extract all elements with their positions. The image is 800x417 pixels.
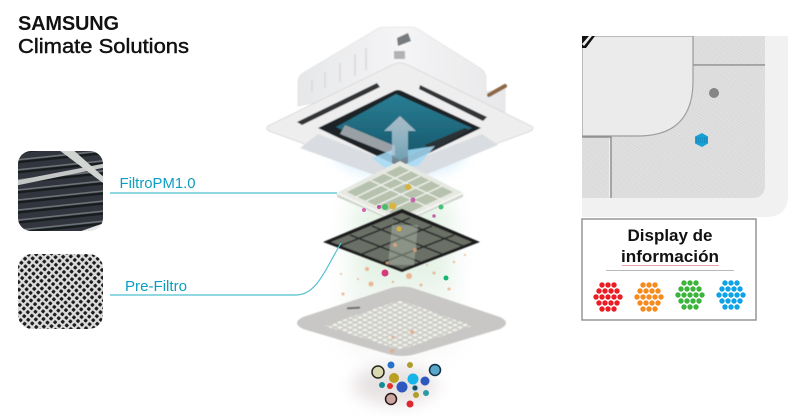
logo: Samsung Climate Solutions: SAMSUNG [18, 13, 119, 35]
thumbnail: PM1.0 filter [18, 151, 103, 231]
blue air [336, 94, 472, 160]
allergen particles [372, 362, 440, 408]
leader line: FiltroPM1.0 [110, 192, 337, 194]
blue indicator [716, 280, 746, 310]
body side ribs [312, 48, 366, 92]
orange indicator [634, 282, 664, 312]
strip edges [582, 36, 765, 198]
centre plate [582, 36, 693, 136]
copper pipe [489, 86, 505, 95]
coloured particles [362, 184, 448, 280]
logo: Samsung Climate Solutions: Climate Solutions [18, 36, 189, 58]
perforated top strip [693, 36, 765, 65]
leader line: Pre-Filtro [110, 243, 341, 295]
legend: display de información: información [621, 247, 719, 266]
illustration: pre-filter [323, 209, 480, 272]
pipe bracket [397, 33, 411, 46]
illustration: front grille [297, 286, 506, 356]
panel lower vents [300, 134, 498, 177]
green indicator [675, 280, 705, 310]
blue indicator [695, 133, 708, 147]
opening [318, 90, 481, 167]
panel [267, 63, 533, 178]
legend title: Display de [628, 226, 712, 245]
label: Pre-Filtro: Pre-Filtro [125, 278, 187, 295]
thumbnail: pre-filter mesh [18, 254, 103, 329]
corner mark [582, 36, 595, 48]
perforated corner [610, 66, 765, 198]
legend: display de información [582, 219, 756, 320]
air glow column [338, 132, 462, 405]
sensor dot [709, 88, 719, 98]
illustration: PM1.0 filter [337, 161, 463, 224]
perforated left strip [582, 137, 609, 198]
air slots [297, 83, 380, 125]
red indicator [593, 282, 623, 312]
panel: front panel close-up [582, 36, 788, 217]
airflow arrow [384, 116, 416, 164]
unit body [298, 27, 505, 112]
blue mist [372, 150, 392, 168]
orange dust [340, 243, 466, 353]
particles between filters [340, 184, 466, 353]
illustration: cassette air conditioner [267, 27, 533, 178]
logo: Samsung Climate Solutions [18, 13, 189, 58]
label: FiltroPM1.0: FiltroPM1.0 [120, 175, 196, 192]
